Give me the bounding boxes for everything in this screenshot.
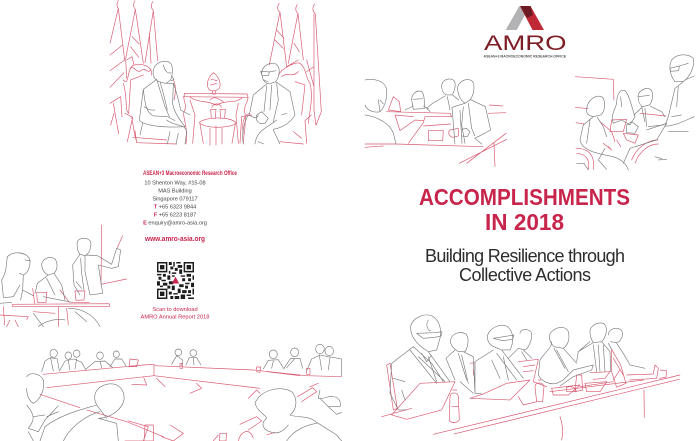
logo: AMRO: [484, 6, 566, 59]
QR caption: [141, 307, 209, 320]
illustration: panel of delegates at a table: [382, 315, 680, 440]
contact details: Singapore 079117: [152, 196, 198, 202]
illustration: left meeting group: [365, 79, 507, 167]
contact details: T +65 6323 9844: [154, 204, 196, 210]
QR caption: Scan to download: [152, 307, 198, 313]
QR code: [157, 262, 194, 299]
illustration: right meeting group: [575, 55, 694, 170]
illustration: large roundtable meeting: [27, 344, 342, 441]
QR caption: AMRO Annual Report 2018: [141, 314, 209, 320]
illustration: delegates around table: [365, 55, 694, 170]
title: ACCOMPLISHMENTS: [419, 184, 630, 210]
subtitle: Building Resilience through: [425, 246, 625, 266]
contact details: 10 Shenton Way, #15-08: [144, 180, 206, 186]
illustration: bilateral meeting with flags: [110, 1, 321, 145]
contact details: MAS Building: [158, 188, 192, 194]
illustration: presenter and seated listeners: [0, 225, 127, 327]
website: www.amro-asia.org: [144, 234, 205, 243]
contact details: ASEAN+3 Macroeconomic Research Office: [143, 170, 237, 177]
subtitle: Collective Actions: [459, 265, 591, 285]
contact details: E enquiry@amro-asia.org: [143, 220, 207, 226]
title: [419, 184, 630, 235]
logo wordmark: AMRO: [484, 31, 566, 55]
subtitle: [425, 246, 625, 285]
title: IN 2018: [485, 209, 564, 235]
logo tagline: ASEAN+3 MACROECONOMIC RESEARCH OFFICE: [484, 55, 566, 59]
contact details: [143, 170, 237, 226]
icon: logo roof mark: [506, 6, 544, 30]
contact details: F +65 6223 8187: [154, 212, 196, 218]
